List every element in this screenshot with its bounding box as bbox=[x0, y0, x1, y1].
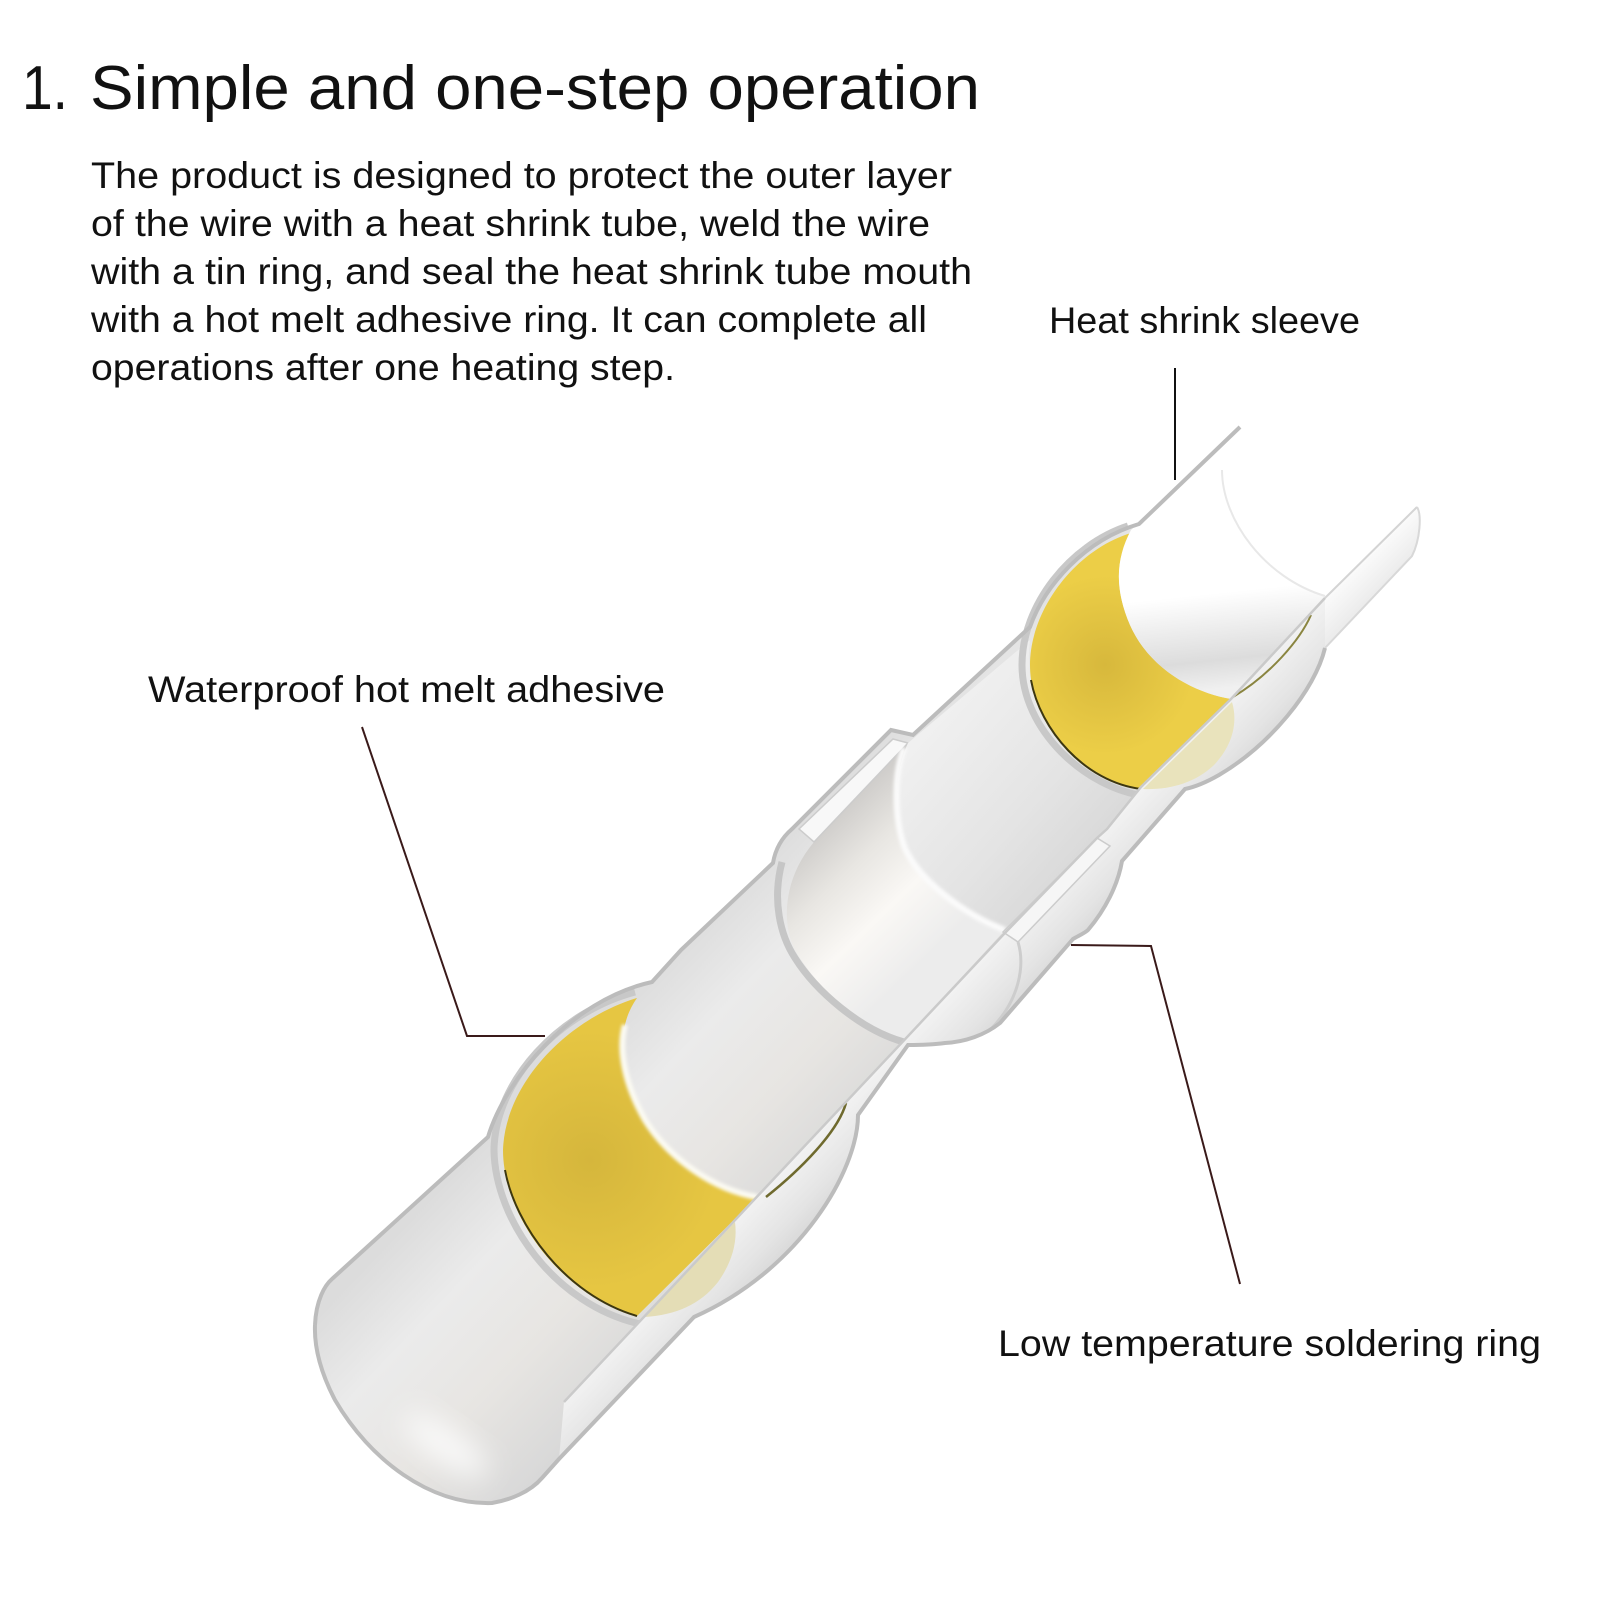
right tail strip bbox=[1325, 507, 1420, 648]
label: heat shrink sleeve: Heat shrink sleeve bbox=[1049, 300, 1360, 341]
upper wire end bbox=[1119, 427, 1325, 699]
description text block: operations after one heating step. bbox=[91, 347, 675, 388]
cut edge bbox=[564, 598, 1325, 1402]
leader line: heat shrink sleeve bbox=[1174, 368, 1176, 480]
outer flange strip bbox=[1003, 838, 1110, 942]
upper pale yellow lens bbox=[1143, 702, 1234, 789]
sleeve body bbox=[315, 524, 1325, 1503]
lower adhesive sliver bbox=[766, 1103, 846, 1197]
description text block: of the wire with a heat shrink tube, weld the wire bbox=[91, 203, 930, 244]
lower adhesive rim bbox=[494, 992, 640, 1324]
title: 1. bbox=[22, 54, 68, 123]
upper adhesive rim bbox=[1022, 526, 1145, 796]
upper adhesive sliver bbox=[1233, 615, 1311, 697]
description text block: with a tin ring, and seal the heat shrink tube mouth bbox=[90, 251, 972, 292]
cutaway solder sleeve illustration bbox=[315, 427, 1420, 1503]
ring rim bbox=[778, 862, 904, 1042]
description text block: The product is designed to protect the outer layer bbox=[91, 155, 952, 196]
label: low temperature soldering ring: Low temperature soldering ring bbox=[998, 1323, 1541, 1364]
wire section dome bbox=[897, 640, 1141, 930]
lower yellow adhesive bbox=[503, 998, 757, 1316]
flange seam bbox=[990, 942, 1021, 1030]
metal ring hollow bbox=[787, 743, 1005, 1040]
description text block bbox=[90, 155, 972, 388]
tail upper edge bbox=[1325, 507, 1417, 598]
lower adhesive edge bbox=[505, 1170, 637, 1316]
upper adhesive edge bbox=[1031, 680, 1141, 789]
front wall of sleeve bbox=[559, 598, 1325, 1459]
sleeve upper outline bbox=[315, 427, 1240, 1325]
lower wire dome highlight bbox=[622, 1025, 757, 1197]
title: Simple and one-step operation bbox=[90, 54, 980, 123]
end cap highlight bbox=[395, 1403, 495, 1487]
faint wire end arc bbox=[1222, 470, 1325, 596]
label: waterproof hot melt adhesive: Waterproof hot melt adhesive bbox=[148, 669, 665, 710]
sleeve lower outline bbox=[315, 648, 1325, 1503]
leader line: soldering ring bbox=[1071, 945, 1240, 1284]
upper yellow adhesive bbox=[1030, 533, 1231, 789]
description text block: with a hot melt adhesive ring. It can complete all bbox=[90, 299, 927, 340]
dome rim bbox=[896, 748, 1005, 930]
leader line: waterproof adhesive bbox=[362, 727, 545, 1036]
lower pale yellow lens bbox=[645, 1222, 736, 1317]
inner flange strip bbox=[799, 739, 908, 842]
tail outer edge bbox=[1325, 507, 1420, 648]
